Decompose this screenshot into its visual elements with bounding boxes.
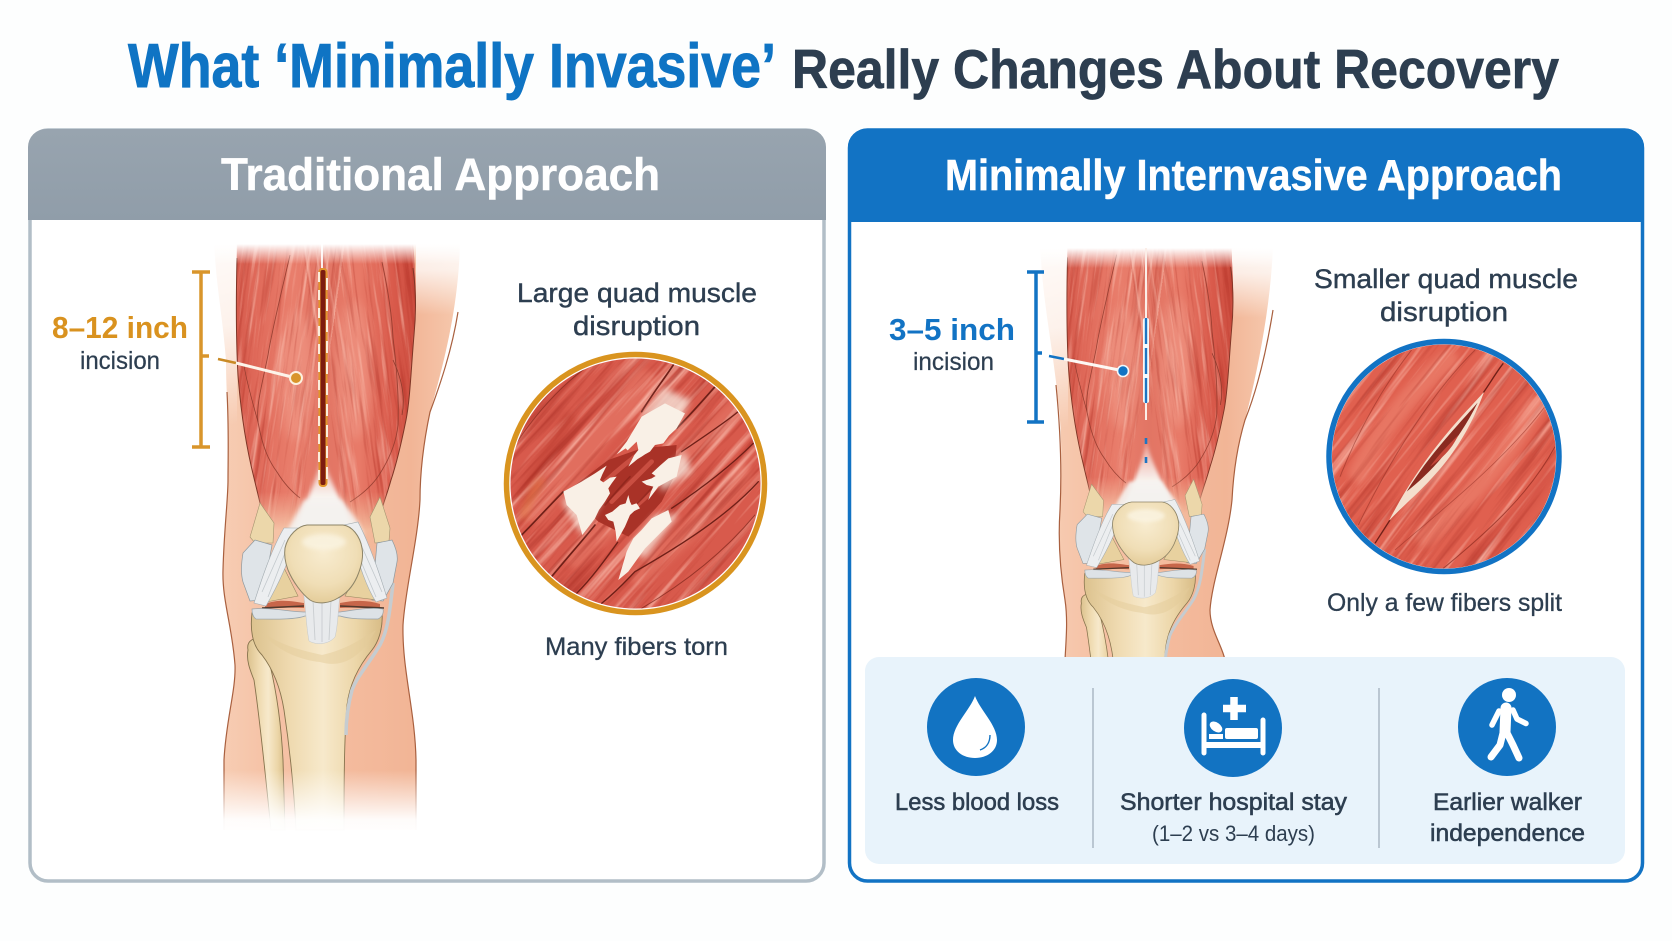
panel header: minimally invasive (848, 129, 1644, 222)
heading: smaller quad muscle disruption: Smaller quad muscle (1314, 264, 1578, 294)
icon: walking person (1458, 678, 1556, 776)
incision label: 8-12 inch: incision (80, 347, 160, 375)
illustration: knee anatomy with long incision (167, 189, 480, 836)
benefits panel (865, 657, 1625, 864)
detail circle: torn muscle fibers (504, 352, 768, 616)
detail circle: few split fibers (1326, 338, 1562, 574)
benefit: shorter hospital stay (1120, 679, 1347, 846)
frayed white ends: soft tails (562, 388, 692, 558)
heading: smaller quad muscle disruption (1314, 264, 1578, 327)
icon: blood drop (927, 678, 1025, 776)
muscle split (1389, 392, 1484, 521)
tear gap (567, 445, 677, 537)
caption: many fibers torn: Many fibers torn (545, 633, 728, 661)
measurement bracket: 8-12 inch (192, 272, 302, 447)
title (128, 32, 1559, 101)
benefit: earlier walker independence (1430, 678, 1585, 847)
heading: smaller quad muscle disruption: disruption (1380, 297, 1508, 327)
benefit: less blood loss: Less blood loss (895, 789, 1059, 816)
panel: traditional approach (28, 129, 875, 881)
panel header: traditional (28, 129, 826, 220)
panel frame: minimally invasive (850, 130, 1642, 881)
panel: minimally invasive approach (848, 129, 1668, 881)
benefit: earlier walker independence: Earlier walker (1433, 789, 1582, 816)
benefit: earlier walker independence: independence (1430, 820, 1585, 847)
long incision line (318, 268, 328, 487)
heading: large quad muscle disruption: disruption (573, 311, 700, 341)
panel header: minimally invasive: Minimally Internvasive Approach (945, 151, 1562, 200)
heading: large quad muscle disruption (517, 278, 757, 341)
measurement bracket: 3-5 inch (1027, 272, 1128, 422)
benefit: shorter hospital stay: (1–2 vs 3–4 days) (1152, 821, 1315, 846)
panel header: traditional: Traditional Approach (221, 149, 660, 200)
incision label: 3-5 inch: 3–5 inch (889, 312, 1015, 347)
heading: large quad muscle disruption: Large quad muscle (517, 278, 757, 308)
title: Really Changes About Recovery (792, 38, 1559, 100)
incision label: 8-12 inch: 8–12 inch (52, 310, 188, 345)
title: What ‘Minimally Invasive’ (128, 32, 776, 101)
incision label: 3-5 inch: incision (913, 348, 994, 376)
incision label: 3-5 inch (889, 312, 1015, 376)
caption: only a few fibers split: Only a few fibers split (1327, 589, 1562, 617)
frayed white ends (563, 403, 685, 580)
illustration: knee anatomy with short incision (1003, 193, 1293, 749)
benefit: shorter hospital stay: Shorter hospital stay (1120, 789, 1347, 816)
icon: hospital bed (1184, 679, 1282, 777)
short incision line (1143, 318, 1149, 463)
benefit: less blood loss (895, 678, 1059, 816)
panel frame: traditional (30, 130, 824, 881)
incision label: 8-12 inch (52, 310, 188, 375)
